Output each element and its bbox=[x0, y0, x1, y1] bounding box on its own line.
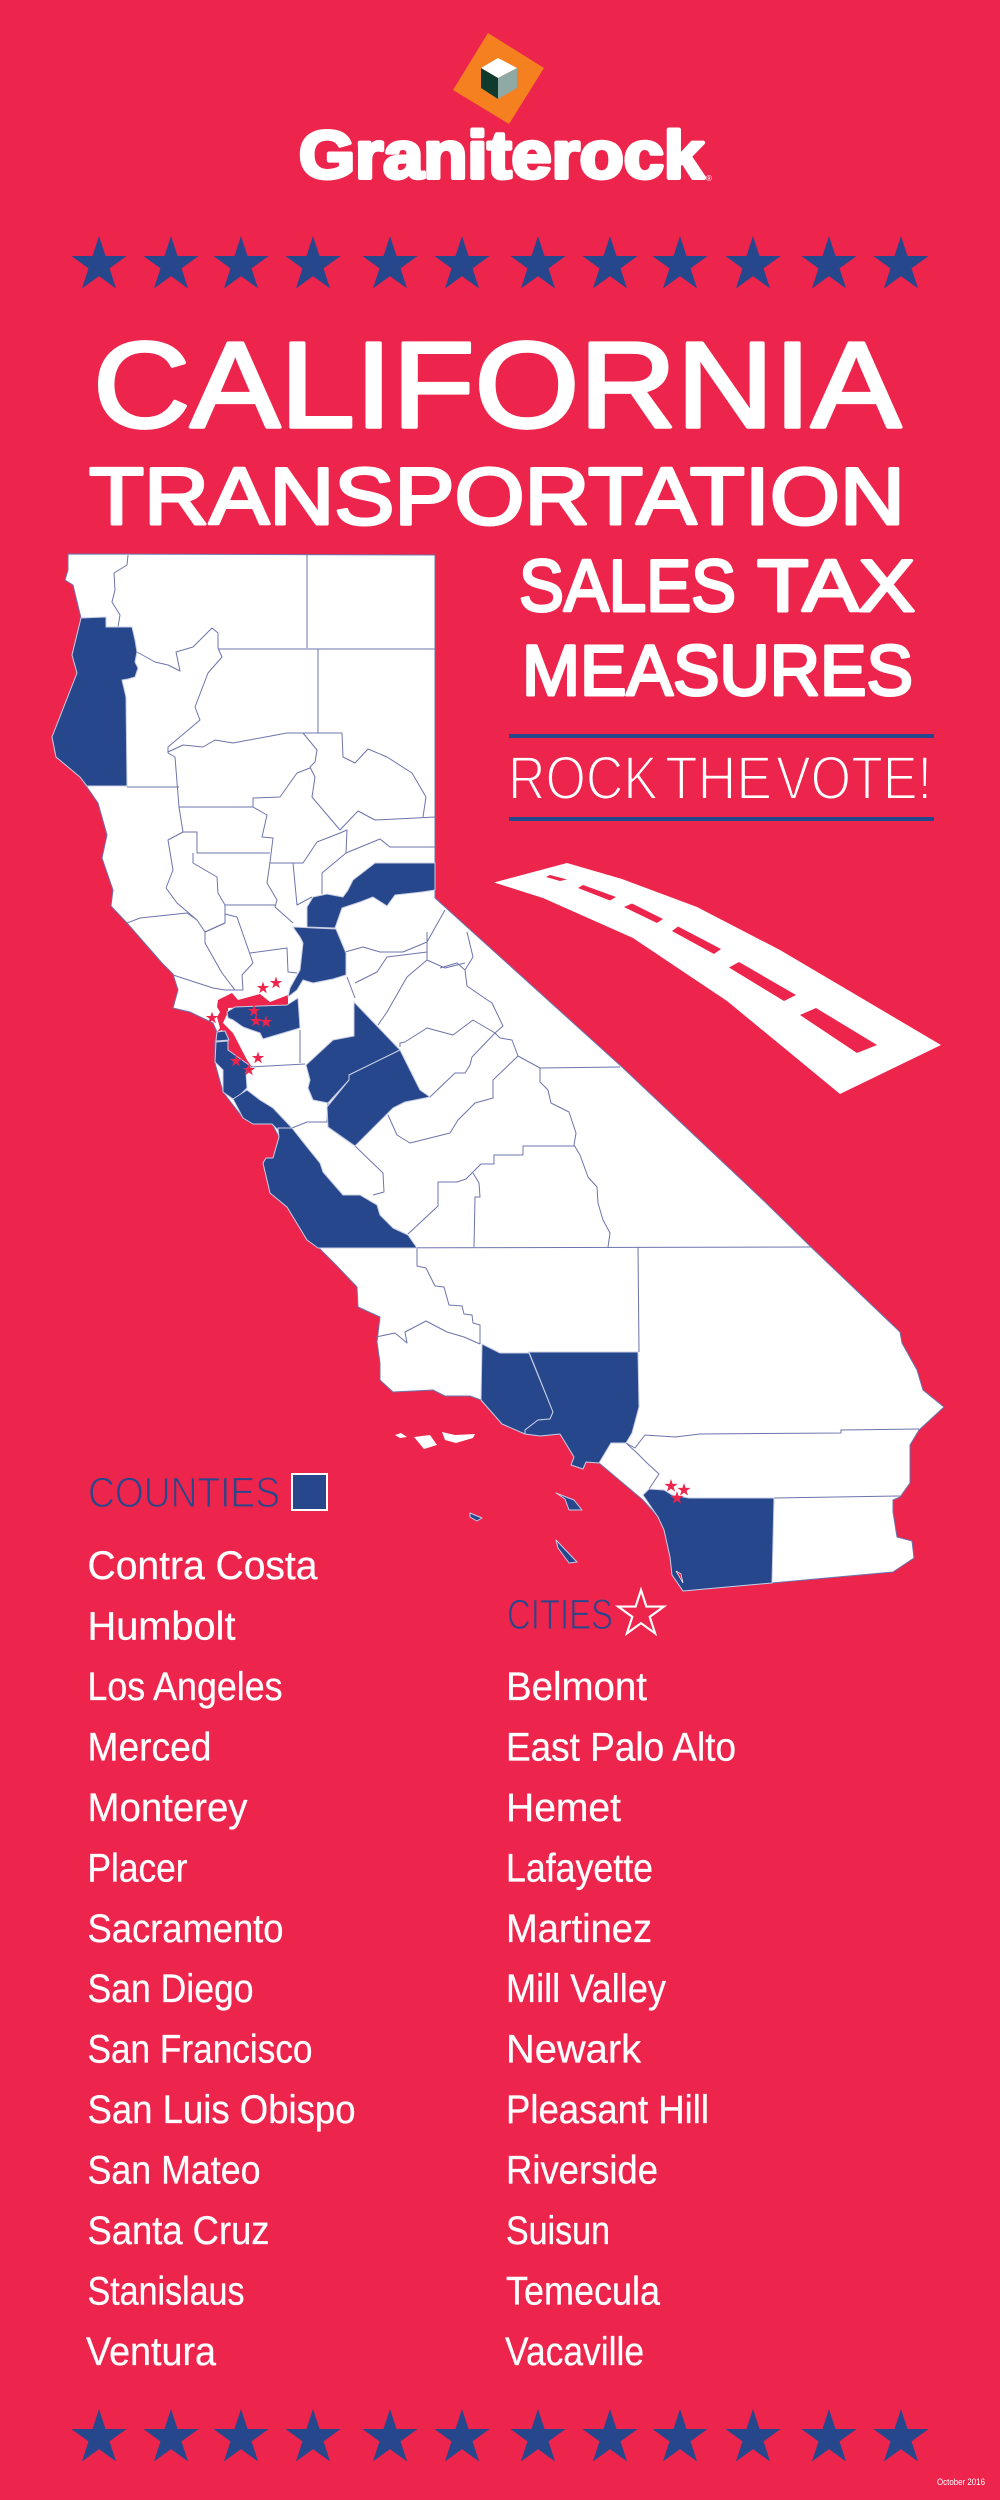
list: cities: Mill Valley bbox=[506, 1967, 666, 2011]
list: counties: Merced bbox=[88, 1725, 212, 1769]
county: Sacramento bbox=[288, 927, 346, 997]
list: cities: Newark bbox=[506, 2028, 642, 2072]
tagline: Rock the Vote: THE bbox=[665, 744, 772, 812]
San Francisco Bay bbox=[217, 993, 288, 1067]
legend heading: Counties: COUNTIES bbox=[88, 1469, 280, 1517]
title: Sales Tax: TAX bbox=[757, 546, 915, 627]
list: counties bbox=[86, 1544, 356, 2374]
list: counties: San Luis Obispo bbox=[88, 2088, 356, 2132]
list: cities: East Palo Alto bbox=[506, 1725, 736, 1769]
county: Stanislaus bbox=[306, 1002, 400, 1103]
tagline: Rock the Vote: VOTE! bbox=[776, 744, 932, 812]
list: cities: Vacaville bbox=[505, 2330, 644, 2374]
San Diego bay notch bbox=[676, 1571, 683, 1583]
channel islands bbox=[395, 1432, 582, 1563]
title: Measures: MEASURES bbox=[522, 632, 913, 711]
county: Los Angeles bbox=[525, 1352, 639, 1469]
bottom star row bbox=[71, 2409, 929, 2461]
list: counties: Los Angeles bbox=[88, 1665, 282, 1709]
list: cities: Riverside bbox=[506, 2149, 658, 2193]
list: cities bbox=[505, 1665, 736, 2374]
county: San Francisco bbox=[216, 1031, 229, 1041]
logo wordmark: Graniterock bbox=[299, 118, 705, 193]
list: cities: Hemet bbox=[506, 1786, 621, 1830]
tagline: Rock the Vote: ROCK bbox=[508, 744, 658, 812]
list: counties: San Mateo bbox=[88, 2149, 260, 2193]
tagline: Rock the Vote bbox=[508, 744, 932, 812]
title: Transportation: TRANSPORTATION bbox=[89, 452, 905, 542]
county: Placer bbox=[307, 863, 435, 928]
list: cities: Suisun bbox=[506, 2209, 610, 2253]
top star row bbox=[71, 236, 929, 288]
list: counties: Placer bbox=[88, 1846, 188, 1890]
list: cities: Martinez bbox=[506, 1907, 652, 1951]
road illustration bbox=[494, 863, 941, 1094]
county: San Diego bbox=[643, 1489, 774, 1591]
list: counties: Sacramento bbox=[88, 1907, 284, 1951]
divider line bottom bbox=[509, 817, 934, 821]
list: counties: Santa Cruz bbox=[88, 2209, 270, 2253]
list: cities: Pleasant Hill bbox=[506, 2088, 709, 2132]
title: Sales Tax: SALES bbox=[519, 546, 736, 627]
state outline bbox=[52, 554, 944, 1591]
county: Santa Cruz bbox=[233, 1090, 292, 1130]
list: counties: Ventura bbox=[86, 2330, 217, 2374]
title: California: CALIFORNIA bbox=[93, 317, 902, 453]
list: cities: Lafayette bbox=[506, 1846, 653, 1890]
logo: Graniterock bbox=[299, 33, 712, 193]
list: counties: Humbolt bbox=[88, 1604, 236, 1648]
list: cities: Temecula bbox=[506, 2270, 661, 2314]
map of California bbox=[52, 554, 944, 1591]
county: Merced bbox=[327, 1050, 430, 1146]
county: Contra Costa bbox=[227, 998, 300, 1039]
county boundary lines bbox=[112, 555, 919, 1498]
county: Humboldt bbox=[52, 617, 138, 786]
county: Ventura bbox=[481, 1344, 553, 1434]
list: counties: Stanislaus bbox=[88, 2270, 244, 2314]
legend swatch: blue square bbox=[292, 1474, 327, 1510]
list: counties: Contra Costa bbox=[88, 1544, 318, 1588]
title: Sales Tax bbox=[519, 546, 915, 627]
date note: October 2016 bbox=[937, 2477, 985, 2487]
icon: orange diamond with cube bbox=[453, 33, 544, 124]
legend heading: Cities: CITIES bbox=[507, 1591, 613, 1639]
city stars bbox=[206, 976, 691, 1504]
divider line top bbox=[509, 734, 934, 738]
legend icon: outlined star bbox=[618, 1590, 664, 1633]
list: counties: San Francisco bbox=[88, 2028, 312, 2072]
list: counties: Monterey bbox=[88, 1786, 248, 1830]
county: San Mateo bbox=[215, 1041, 249, 1099]
list: cities: Belmont bbox=[506, 1665, 647, 1709]
county: San Luis Obispo bbox=[263, 1128, 417, 1248]
list: counties: San Diego bbox=[88, 1967, 254, 2011]
registered mark: ® bbox=[706, 174, 712, 183]
